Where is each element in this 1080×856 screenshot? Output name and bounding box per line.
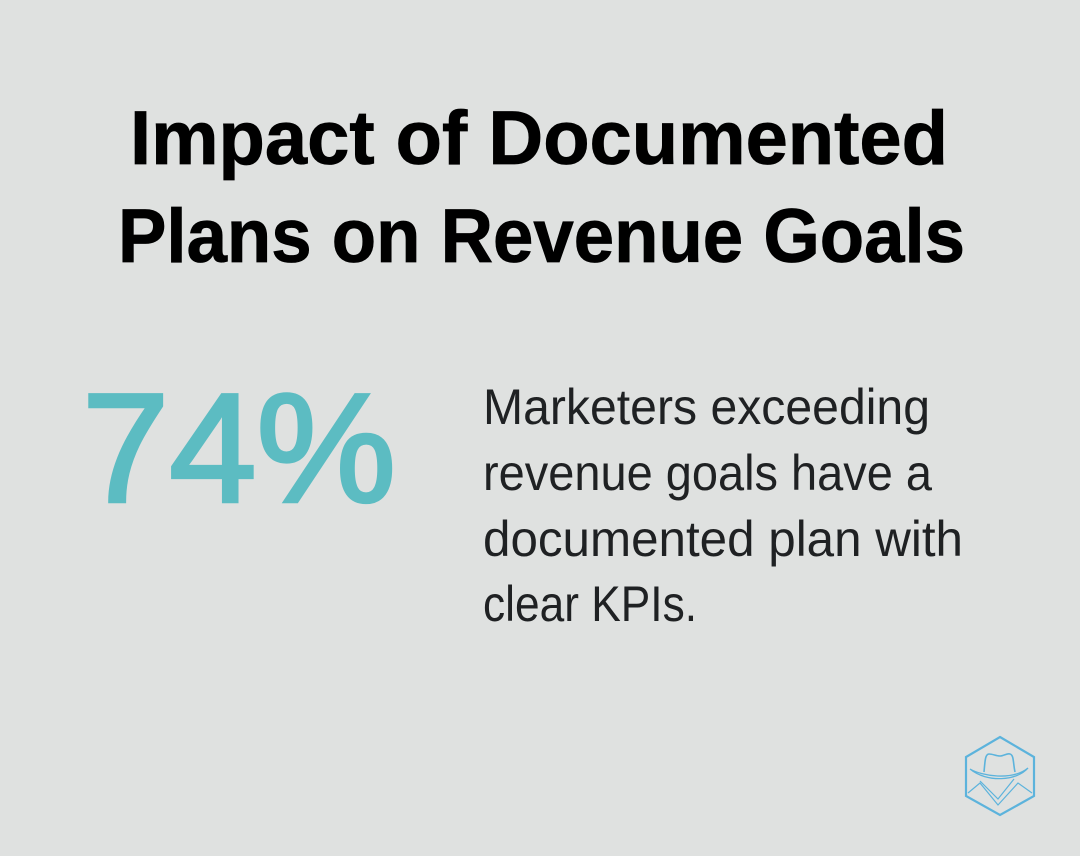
icon: hexagon outline <box>966 737 1034 815</box>
icon: hat brim <box>970 768 1028 779</box>
description text: Marketers exceeding <box>483 379 930 435</box>
icon: collar <box>968 779 1032 805</box>
description text: clear KPIs. <box>483 576 697 632</box>
description text <box>483 379 963 632</box>
description text: revenue goals have a <box>483 445 932 501</box>
big statistic: 74%: 74% <box>82 362 396 534</box>
title: Impact of Documented <box>130 96 948 181</box>
title <box>118 96 965 279</box>
icon: hat crown <box>984 754 1015 772</box>
icon: hexagon logo with hat and collar <box>966 737 1034 815</box>
description text: documented plan with <box>483 511 963 567</box>
title: Plans on Revenue Goals <box>118 194 965 279</box>
